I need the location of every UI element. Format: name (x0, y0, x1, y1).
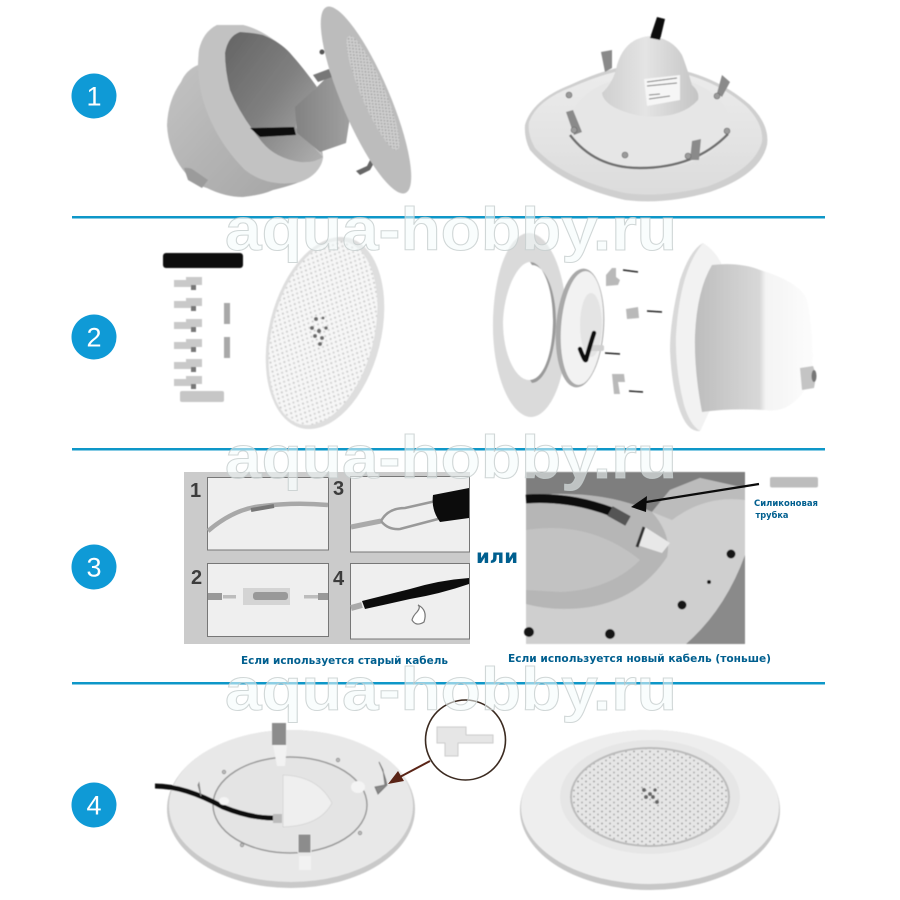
cable tail (580, 333, 594, 360)
step 4 badge (72, 782, 116, 828)
LED centre cluster (642, 788, 659, 804)
cable in housing (250, 127, 296, 137)
dark lower corner (686, 555, 745, 644)
step 1 badge (72, 74, 116, 118)
bottom clip (298, 834, 311, 870)
lamp clip bottom (356, 160, 374, 175)
image: assembled lamp (520, 730, 780, 890)
step 3 badge (72, 544, 116, 590)
arrow: to sleeve (631, 484, 759, 512)
left clip (198, 783, 229, 805)
step 3 badge: 3 (86, 552, 102, 582)
lamp lens (338, 31, 408, 155)
housing interior (225, 32, 323, 162)
front ring (493, 233, 567, 417)
right clip (351, 762, 387, 794)
black sleeve (163, 253, 243, 268)
step 4 badge: 4 (86, 790, 102, 820)
clips (566, 50, 730, 160)
step 1 badge: 1 (86, 82, 102, 112)
image: new cable photo (524, 472, 745, 644)
watermark: middle: aqua-hobby.ru (225, 424, 677, 491)
cable (155, 786, 273, 818)
subpanel 3 (333, 476, 470, 552)
lamp cone (295, 72, 350, 152)
housing rim (198, 25, 323, 184)
holes (524, 550, 736, 639)
divider 3 (72, 682, 825, 684)
flange plate (525, 65, 767, 201)
watermark: top: aqua-hobby.ru (225, 196, 677, 263)
image: lamp back with cable (155, 723, 415, 888)
subpanel 4: 4 (333, 568, 345, 590)
icon: silicone tube (770, 477, 818, 488)
housing body (167, 25, 323, 197)
spacers (224, 303, 230, 358)
lamp clip top (313, 69, 332, 82)
screws (605, 270, 662, 392)
LED field (572, 749, 728, 845)
arrow: to bracket (388, 761, 430, 784)
bell (602, 36, 698, 117)
panel: old cable steps (184, 472, 470, 644)
label: silicone tube: трубка (756, 510, 789, 521)
housing body (695, 264, 813, 412)
connector (637, 527, 670, 553)
image: exploded view (493, 233, 816, 431)
cable (526, 499, 612, 512)
image: open housing with lamp (167, 0, 428, 202)
image: lamp rear view (525, 17, 767, 201)
subpanel 3: 3 (333, 478, 344, 500)
subpanel 1 (190, 478, 328, 550)
callout: bracket detail (426, 700, 506, 780)
screws (222, 758, 362, 847)
housing nozzle (184, 168, 208, 188)
inner ring (213, 757, 367, 853)
cable (650, 17, 665, 40)
label: silicone tube (754, 499, 818, 521)
text: or: или (476, 546, 518, 568)
housing nozzle (800, 366, 816, 390)
label: silicone tube: Силиконовая (754, 499, 818, 509)
caption: new cable: Если используется новый кабель (тоньше) (508, 653, 771, 665)
divider 1 (72, 216, 825, 218)
top clip (272, 723, 287, 766)
step 2 badge (72, 314, 116, 360)
lower dome (571, 75, 729, 169)
groove (560, 740, 740, 854)
bowl (526, 495, 668, 609)
housing flange (670, 243, 718, 431)
label (644, 75, 680, 106)
divider 2 (72, 448, 825, 450)
subpanel 1: 1 (190, 480, 201, 502)
image: kit of parts (163, 224, 403, 442)
watermark: bottom: aqua-hobby.ru (225, 656, 677, 723)
screws (566, 92, 730, 159)
flange (520, 730, 780, 890)
hump (283, 775, 332, 827)
caption: old cable: Если используется старый кабель (241, 655, 448, 667)
step 2 badge: 2 (86, 322, 102, 352)
brackets (606, 268, 639, 394)
subpanel 4 (333, 564, 470, 639)
subpanel 2: 2 (191, 567, 202, 589)
subpanel 2 (191, 564, 328, 636)
metal ring (570, 134, 728, 168)
clips (174, 277, 202, 389)
dark top band (526, 472, 745, 512)
lamp back disc (552, 267, 608, 389)
silicone tube (180, 391, 224, 402)
rim (570, 747, 730, 847)
plate (167, 730, 415, 888)
lamp flange (304, 0, 428, 202)
LED lamp (247, 224, 403, 442)
